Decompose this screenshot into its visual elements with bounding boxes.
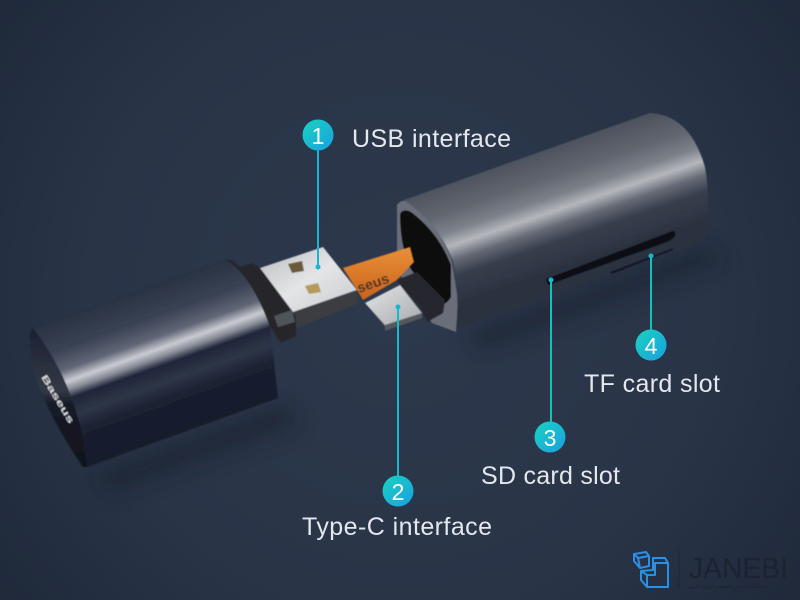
orange connecting cable <box>343 247 414 300</box>
callout 1: USB interface: 1 <box>312 123 324 149</box>
watermark logo: JANEBI: فروشگاه اینترنتی تخصصی لوازم جانبی <box>689 582 769 590</box>
device: cap with USB plug <box>30 247 357 467</box>
watermark logo: JANEBI <box>634 550 788 590</box>
cap body <box>33 260 278 467</box>
callout 2: Type-C interface: 2 <box>392 479 404 505</box>
cap end face <box>30 328 87 467</box>
callout 3: SD card slot <box>481 278 620 490</box>
callout 4: TF card slot <box>584 254 720 398</box>
rim plate <box>397 201 458 332</box>
USB black collar <box>225 259 296 343</box>
collar highlight <box>274 310 295 327</box>
orange connecting cable: seus <box>355 270 391 296</box>
callout 3: SD card slot: SD card slot <box>481 462 620 490</box>
callout 3: SD card slot: 3 <box>544 425 556 451</box>
callout 1: USB interface <box>302 120 511 270</box>
callout 4: TF card slot: 4 <box>645 333 658 359</box>
SD card slot <box>546 231 675 285</box>
callout 2: Type-C interface <box>302 304 492 541</box>
watermark logo: JANEBI: JANEBI <box>689 553 788 585</box>
reader body <box>404 113 708 329</box>
device: main reader body <box>397 113 708 332</box>
Baseus logo on cap: Baseus <box>39 373 76 425</box>
cast shadows <box>95 245 725 495</box>
TF card slot <box>610 248 673 274</box>
callout 4: TF card slot: TF card slot <box>584 370 720 398</box>
USB connector <box>260 247 357 328</box>
callout 2: Type-C interface: Type-C interface <box>302 513 492 541</box>
icon: cubes <box>634 552 668 587</box>
Type-C connector <box>365 272 445 331</box>
opening <box>400 210 451 304</box>
callout 1: USB interface: USB interface <box>352 125 511 153</box>
